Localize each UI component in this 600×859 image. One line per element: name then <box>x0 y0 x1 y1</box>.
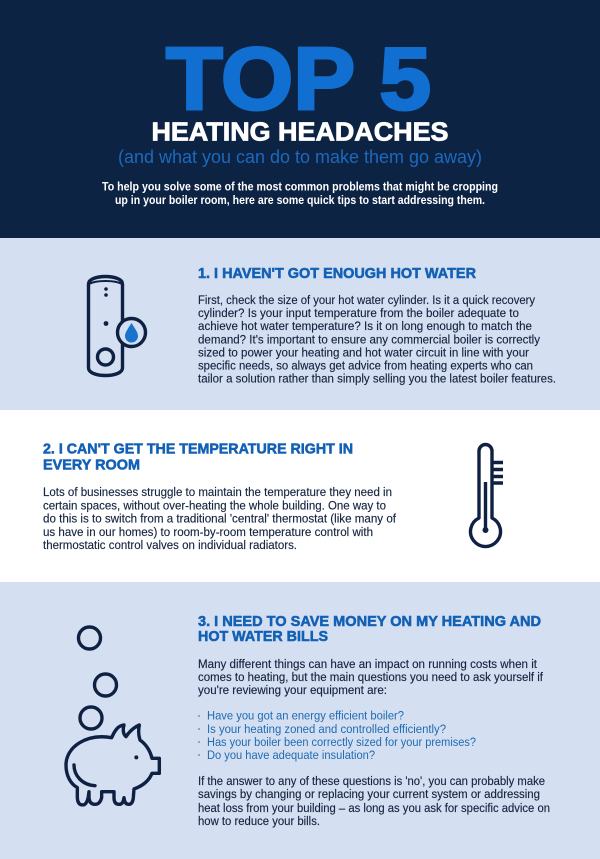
text block: section 3 intro: comes to heating, but the main questions you need to ask yourself if <box>198 670 544 684</box>
text block: section 1 <box>198 293 556 386</box>
text block: section 3 conclusion: If the answer to any of these questions is 'no', you can probably make <box>198 774 545 788</box>
list: questions <box>198 708 476 762</box>
text block: section 2: Lots of businesses struggle to maintain the temperature they need in <box>43 485 392 499</box>
text block: section 1: demand? It's important to ensure any commercial boiler is correctly <box>198 332 541 346</box>
icon: piggy bank <box>66 725 159 805</box>
text block: section 2: do this is to switch from a traditional 'central' thermostat (like many of <box>43 512 397 526</box>
list: questions: Is your heating zoned and controlled efficiently? <box>207 722 446 736</box>
text block: section 1: cylinder? Is your input temperature from the boiler adequate to <box>198 306 519 320</box>
list: questions: Has your boiler been correctly sized for your premises? <box>207 735 476 749</box>
text block: section 3 conclusion: savings by changing or replacing your current system or addressing <box>198 787 540 801</box>
text block: section 1: First, check the size of your hot water cylinder. Is it a quick recovery <box>198 293 536 307</box>
panel: header <box>0 0 600 238</box>
heading: section 2: EVERY ROOM <box>43 458 140 474</box>
text block: section 1: sized to power your heating and hot water circuit in line with your <box>198 346 529 360</box>
text block: section 3 conclusion: how to reduce your bills. <box>198 814 320 828</box>
text block: section 2: thermostatic control valves on individual radiators. <box>43 538 297 552</box>
icon: hot water cylinder <box>88 276 146 376</box>
panel: saving money <box>0 582 600 859</box>
panel: hot water <box>0 238 600 410</box>
text block: section 1: tailor a solution rather than simply selling you the latest boiler features. <box>198 372 556 386</box>
intro text: up in your boiler room, here are some quick tips to start addressing them. <box>115 193 485 207</box>
heading: section 3: HOT WATER BILLS <box>198 629 328 645</box>
heading: section 3 <box>198 614 541 645</box>
heading: section 2: 2. I CAN'T GET THE TEMPERATURE RIGHT IN <box>43 442 353 458</box>
text block: section 3 conclusion <box>198 774 550 828</box>
intro text <box>102 180 498 207</box>
title: top 5: TOP 5 <box>166 29 431 128</box>
heading: section 1: 1. I HAVEN'T GOT ENOUGH HOT WATER <box>198 266 477 282</box>
icon: coins <box>78 627 116 729</box>
list: questions: Do you have adequate insulation? <box>207 748 375 762</box>
text block: section 2: certain spaces, without over-heating the whole building. One way to <box>43 498 386 512</box>
intro text: To help you solve some of the most common problems that might be cropping <box>102 180 498 194</box>
text block: section 1: specific needs, so always get advice from heating experts who can <box>198 358 533 372</box>
text block: section 3 intro: you're reviewing your equipment are: <box>198 683 387 697</box>
heading: heating headaches: HEATING HEADACHES <box>152 116 448 146</box>
heading: section 2 <box>43 442 353 474</box>
text block: section 3 intro <box>198 657 544 697</box>
subtitle: (and what you can do to make them go away) <box>118 146 482 167</box>
heading: section 3: 3. I NEED TO SAVE MONEY ON MY HEATING AND <box>198 614 541 630</box>
text block: section 2: us have in our homes) to room-by-room temperature control with <box>43 525 373 539</box>
text block: section 2 <box>43 485 397 552</box>
list: questions: Have you got an energy efficient boiler? <box>207 708 404 722</box>
text block: section 1: achieve hot water temperature? Is it on long enough to match the <box>198 319 532 333</box>
text block: section 3 intro: Many different things can have an impact on running costs when it <box>198 657 538 671</box>
icon: thermometer <box>471 445 503 547</box>
text block: section 3 conclusion: heat loss from your building – as long as you ask for specific advice on <box>198 801 550 815</box>
panel: temperature <box>0 410 600 582</box>
